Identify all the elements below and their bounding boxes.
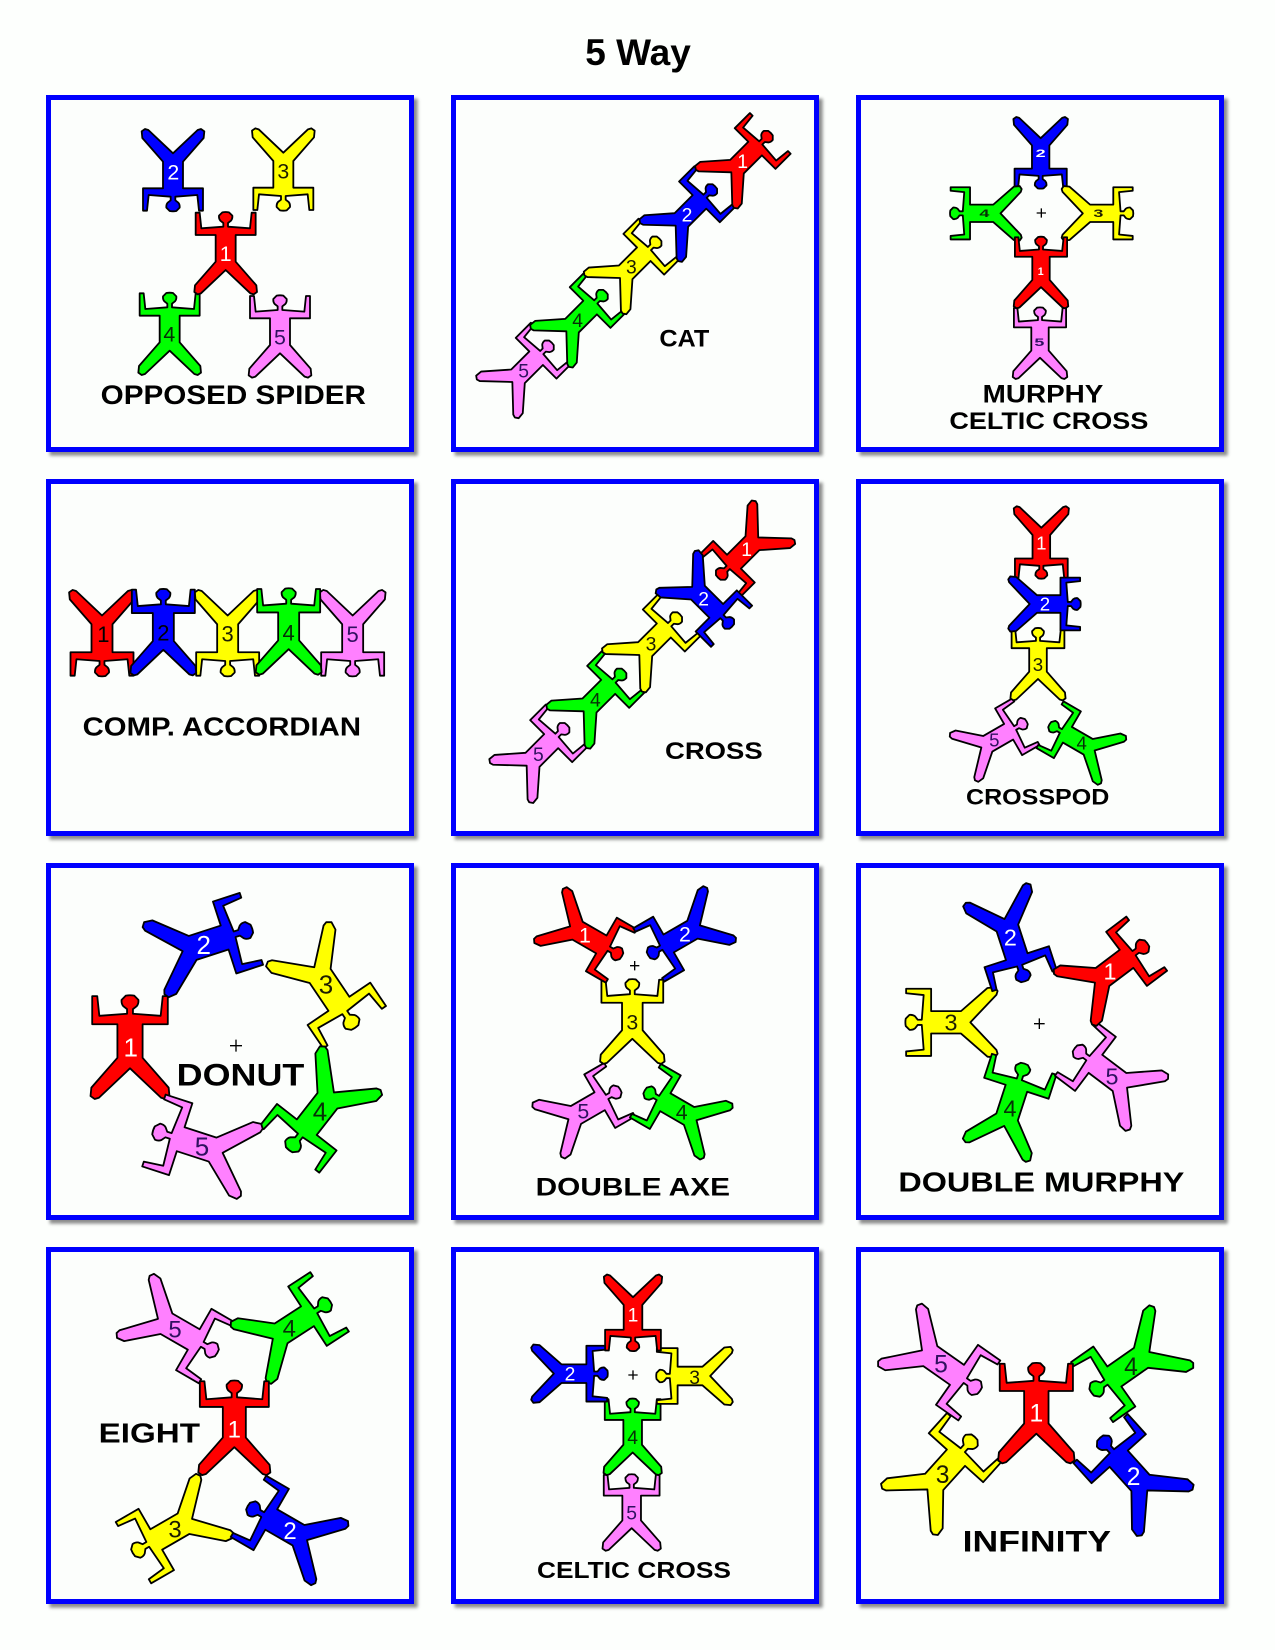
figure 5 pink: 5: [989, 730, 1000, 751]
figure 1 red: 1: [1104, 959, 1116, 985]
label: EIGHT: [99, 1418, 200, 1449]
figure 1 red: 1: [1038, 266, 1044, 278]
figure 3 yellow: 3: [646, 634, 656, 655]
figure 5 pink: 5: [626, 1504, 637, 1525]
figure 3 yellow: [114, 1472, 235, 1585]
figure 1 red: 1: [228, 1416, 241, 1443]
panel: opposed spider: [48, 97, 411, 449]
figure 3 yellow: 3: [626, 258, 637, 279]
figure 3 yellow: [195, 590, 261, 676]
panel: murphy celtic cross: [858, 97, 1221, 449]
figure 4 green: 4: [283, 1316, 296, 1343]
center mark: [230, 1040, 242, 1052]
label: OPPOSED SPIDER: [101, 380, 366, 410]
figure 4 green: [962, 1053, 1058, 1163]
panel: comp. accordian: [48, 481, 411, 833]
figure 4 green: [229, 1270, 350, 1385]
figure 4 green: [258, 1044, 384, 1174]
figure 1 red: 1: [628, 1306, 638, 1327]
figure 5 pink: [249, 295, 311, 378]
figure 4 green: [138, 293, 201, 375]
center mark: [1037, 208, 1046, 218]
figure 3 yellow: [600, 592, 702, 694]
figure 5 pink: 5: [577, 1099, 589, 1123]
figure 5 pink: 5: [518, 362, 529, 383]
figure 3 yellow: 3: [319, 969, 333, 999]
panel: crosspod: [858, 481, 1221, 833]
label: CELTIC CROSS: [537, 1557, 731, 1583]
figure 4 green: 4: [1004, 1095, 1017, 1121]
figure 4 green: 4: [163, 323, 175, 347]
label: DOUBLE AXE: [536, 1175, 730, 1202]
label: COMP. ACCORDIAN: [83, 712, 361, 742]
figure 2 blue: 2: [157, 620, 169, 645]
figure 3 yellow: 3: [1033, 654, 1043, 675]
figure 3 yellow: 3: [689, 1368, 700, 1389]
figure 2 blue: 2: [565, 1365, 575, 1386]
figure 5 pink: 5: [347, 622, 359, 647]
figure 5 pink: 5: [274, 325, 286, 349]
figure 5 pink: 5: [533, 745, 544, 766]
figure 2 blue: [962, 882, 1058, 992]
figure 5 pink: [876, 1302, 1002, 1422]
figure 5 pink: 5: [168, 1316, 182, 1343]
figure 4 green: 4: [979, 208, 989, 220]
figure 3 yellow: [252, 128, 315, 211]
figure 1 red: 1: [579, 924, 591, 948]
figure 1 red: 1: [741, 540, 752, 561]
label line 2: CELTIC CROSS: [949, 408, 1148, 435]
center mark: [628, 1370, 638, 1380]
figure 5 pink: 5: [934, 1352, 948, 1379]
figure 1 red: [69, 590, 135, 676]
panel: cat: [453, 97, 816, 449]
label: MURPHY: [983, 380, 1103, 408]
figure 1 red: [532, 886, 638, 984]
figure 2 blue: 2: [283, 1518, 297, 1545]
figure 2 blue: [632, 885, 738, 983]
figure 5 pink: [948, 697, 1041, 783]
figure 2 blue: [142, 129, 204, 211]
figure 4 green: [1035, 700, 1128, 786]
panel: eight: [48, 1250, 411, 1601]
figure 3 yellow: 3: [1093, 208, 1103, 220]
figure 1 red: [1052, 915, 1169, 1027]
figure 2 blue: [130, 589, 196, 675]
figure 1 red: 1: [1029, 1401, 1043, 1428]
figure 3 yellow: [656, 1347, 733, 1405]
figure 5 pink: [603, 1474, 661, 1551]
figure 3 yellow: [1010, 628, 1066, 700]
figure 3 yellow: 3: [945, 1010, 957, 1036]
label: CROSS: [665, 738, 763, 765]
figure 3 yellow: [582, 217, 681, 316]
figure 4 green: 4: [590, 691, 601, 712]
center mark: [1034, 1018, 1045, 1029]
figure 4 green: [545, 649, 646, 750]
figure 1 red: [1014, 506, 1069, 579]
figure 2 blue: [1008, 576, 1081, 632]
label: DONUT: [177, 1057, 304, 1092]
figure 4 green: 4: [627, 1428, 638, 1449]
figure 1 red: [91, 995, 169, 1099]
figure 2 blue: 2: [679, 923, 691, 947]
figure 5 pink: 5: [195, 1132, 209, 1162]
figure 2 blue: 2: [698, 589, 709, 610]
figure 2 blue: 2: [1127, 1464, 1141, 1491]
figure 2 blue: 2: [1036, 148, 1046, 160]
figure 5 pink: 5: [1034, 337, 1044, 349]
figure 2 blue: 2: [1004, 924, 1017, 950]
figure 5 pink: [115, 1272, 236, 1385]
figure 1 red: [604, 1275, 662, 1351]
figure 3 yellow: 3: [222, 621, 234, 646]
figure 3 yellow: 3: [626, 1010, 638, 1034]
figure 4 green: [1069, 1304, 1196, 1424]
figure 3 yellow: 3: [936, 1462, 950, 1489]
figure 4 green: 4: [676, 1100, 688, 1124]
figure 4 green: 4: [313, 1097, 327, 1127]
label: CROSSPOD: [966, 785, 1109, 810]
figure 2 blue: 2: [682, 205, 692, 226]
figure 2 blue: [1072, 1412, 1196, 1538]
panel: celtic cross: [453, 1250, 816, 1601]
label: CAT: [659, 326, 710, 353]
figure 4 green: 4: [572, 311, 583, 332]
figure 4 green: [950, 186, 1022, 241]
figure 5 pink: [488, 703, 589, 805]
panel: double murphy: [858, 866, 1221, 1217]
figure 2 blue: 2: [196, 930, 211, 960]
figure 1 red: [998, 1363, 1075, 1463]
figure 1 red: 1: [737, 152, 748, 173]
label: DOUBLE MURPHY: [898, 1166, 1185, 1197]
figure 1 red: 1: [1036, 533, 1047, 554]
panel: cross: [453, 481, 816, 833]
figure 4 green: [529, 271, 627, 369]
figure 3 yellow: 3: [277, 159, 289, 183]
figure 1 red: [694, 112, 792, 210]
figure 1 red: [696, 499, 797, 599]
figure 3 yellow: [600, 979, 665, 1064]
figure 5 pink: [141, 1093, 264, 1200]
figure 3 yellow: [1062, 186, 1133, 241]
figure 4 green: [629, 1062, 734, 1161]
figure 2 blue: 2: [167, 160, 179, 184]
panel: donut: [48, 866, 411, 1217]
panel: infinity: [858, 1250, 1221, 1601]
figure 2 blue: [1013, 117, 1068, 189]
figure 1 red: [194, 212, 257, 294]
title: 5 Way: [585, 32, 691, 73]
figure 1 red: 1: [97, 622, 109, 647]
figure 3 yellow: [905, 987, 998, 1057]
figure 2 blue: [531, 1345, 608, 1403]
label: INFINITY: [963, 1525, 1111, 1558]
panel: double axe: [453, 866, 816, 1217]
figure 1 red: 1: [220, 242, 232, 266]
figure 5 pink: [1053, 1020, 1170, 1132]
figure 4 green: [604, 1399, 662, 1475]
figure 4 green: 4: [283, 620, 295, 645]
figure 2 blue: [141, 891, 264, 998]
figure 5 pink: 5: [1106, 1064, 1118, 1090]
figure 2 blue: [638, 165, 736, 263]
figure 3 yellow: 3: [168, 1516, 182, 1543]
figure 2 blue: [654, 549, 754, 648]
figure 5 pink: [531, 1061, 636, 1160]
figure 4 green: 4: [1124, 1354, 1138, 1381]
figure 4 green: 4: [1076, 733, 1087, 754]
figure 1 red: 1: [123, 1032, 138, 1062]
figure 1 red: [198, 1380, 270, 1475]
figure 4 green: [256, 588, 322, 675]
figure 5 pink: [320, 590, 386, 676]
figure 5 pink: [1013, 307, 1067, 379]
figure 5 pink: [475, 321, 573, 420]
figure 3 yellow: [264, 920, 388, 1050]
figure 1 red: [1014, 237, 1068, 308]
center mark: [630, 961, 639, 970]
figure 2 blue: 2: [1040, 594, 1050, 615]
figure 3 yellow: [879, 1411, 1003, 1537]
figure 2 blue: [229, 1474, 350, 1587]
